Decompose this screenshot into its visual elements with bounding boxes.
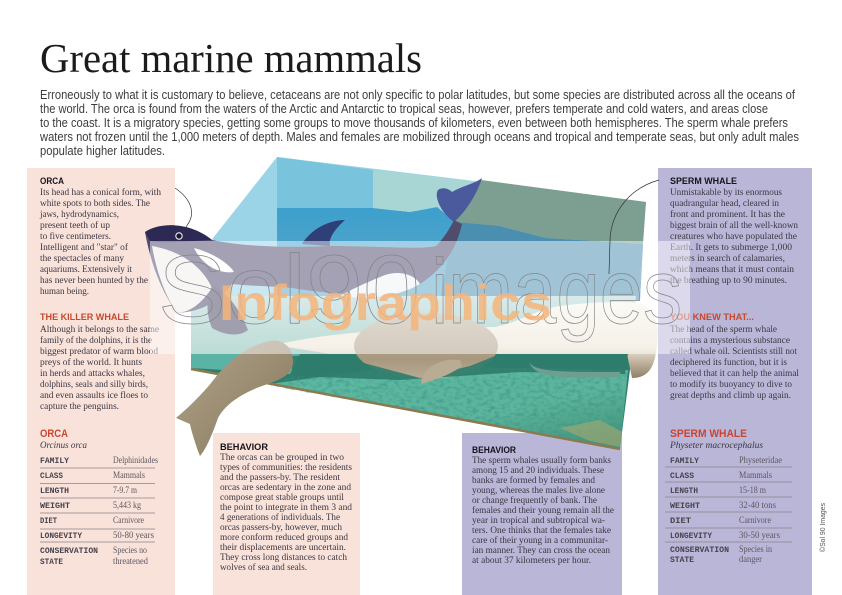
sperm whale [176,302,658,456]
sperm whale description: SPERM WHALE [670,176,737,186]
orca data table: 5,443 kg [113,500,141,510]
panel: orca behavior: BEHAVIOR [220,442,269,452]
sperm whale description [670,176,798,286]
panel: orca behavior: more conform reduced groups and [220,532,348,543]
killer whale description: capture the penguins. [40,401,119,412]
orca description: the spectacles of many [40,253,124,264]
whale tail [176,341,293,456]
sperm whale data table: CONSERVATION [670,545,729,555]
watermark: Infographics: Infographics [219,275,552,331]
killer whale description [40,312,159,412]
orca data table: ORCA [40,428,68,440]
tail fluke [437,178,482,222]
did you know text [670,312,799,401]
orca data table: LONGEVITY [40,531,83,541]
watermark: Sol90images [158,235,682,344]
orca pectoral fin [208,286,248,334]
sperm whale description: front and prominent. It has the [670,209,785,220]
callout line: orca [175,188,192,239]
sperm whale data table: SPERM WHALE [670,428,747,440]
illustration: ocean cross-section with whales [145,157,658,456]
did you know text: YOU KNEW THAT... [670,312,754,322]
panel: sperm whale behavior: ian manner. They can cross the ocean [472,545,610,556]
sperm whale data table: danger [739,554,762,564]
sperm whale data table: 30-50 years [739,530,780,540]
sperm whale data table [665,428,792,565]
sperm whale data table: Carnivore [739,515,771,525]
killer whale description: family of the dolphins, it is the [40,335,152,346]
panel: orca behavior: types of communities: the residents [220,462,352,473]
killer whale description: biggest predator of warm blood [40,346,158,357]
orca data table: Delphinidades [113,455,158,465]
did you know text: believed that it can help the animal [670,368,799,379]
panel: sperm whale behavior: care of their young in a communitar- [472,535,608,546]
orca description [39,176,161,297]
sperm whale data table: CLASS [670,471,694,481]
orca eye patch [194,248,234,272]
panel: orca behavior: orcas passers-by, however, much [220,522,342,533]
whale lower jaw [529,362,620,378]
panel: orca behavior: The orcas can be grouped in two [220,452,344,463]
callout line: sperm whale [609,180,659,274]
sperm whale data table: DIET [670,516,691,526]
panel: sperm whale behavior: year in tropical and subtropical wa- [472,515,605,526]
orca description: human being. [40,286,89,297]
orca belly [152,246,212,313]
watermark band [150,241,690,354]
panel: orca behavior: 4 generations of individuals. The [220,512,340,523]
whale fin [421,360,462,384]
sperm whale data table: Physeteridae [739,455,782,465]
sperm whale data table: LENGTH [670,486,698,496]
orca description: white spots to both sides. The [40,198,150,209]
orca description: aquariums. Extensively it [40,264,132,275]
orca description: to five centimeters. [40,231,111,242]
orca data table: Carnivore [113,515,144,525]
orca body [145,220,462,313]
did you know text: called whale oil. Scientists still not [670,346,797,357]
sperm whale description: quadrangular head, cleared in [670,198,779,209]
panel: orca behavior: orcas are sedentary in the zone and [220,482,351,493]
panel: sperm whale behavior: BEHAVIOR [472,445,516,455]
sperm whale description: Unmistakable by its enormous [670,187,782,198]
panel: orca behavior: their displacements are uncertain. [220,542,346,553]
whale hump [354,313,498,379]
orca data table: 7-9.7 m [113,485,137,495]
panel: sperm whale behavior: ters. One thinks that the females take [472,525,611,536]
orca data table: DIET [40,516,57,526]
orca description: has never been hunted by the [40,275,148,286]
watermark: Sol90images: images [431,241,682,343]
orca description: jaws, hydrodynamics, [39,209,119,220]
orca data table: CONSERVATION [40,546,98,556]
orca data table: LENGTH [40,486,69,496]
image credit: ©Sol 90 Images [819,503,827,552]
sperm whale data table: 32-40 tons [739,500,776,510]
intro text block [39,88,799,158]
panel: orca [27,168,175,595]
panel: orca behavior [213,433,360,595]
orca description: ORCA [40,176,64,186]
intro text block: populate higher latitudes. [40,144,165,158]
sperm whale data table: Mammals [739,470,772,480]
orca white belly patch [340,273,420,298]
orca data table: STATE [40,557,63,567]
dorsal fin [302,220,345,246]
orca data table: 50-80 years [113,530,154,540]
panel: sperm whale behavior: females and their young remain all the [472,505,614,516]
killer whale description: Although it belongs to the same [40,324,159,335]
orca data table: threatened [113,556,148,566]
killer whale description: in herds and attacks whales, [40,368,145,379]
killer whale description: THE KILLER WHALE [40,312,129,322]
sperm whale description: the breathing up to 90 minutes. [670,275,787,286]
sperm whale data table: Species in [739,544,772,554]
orca head cap [145,225,212,242]
panel: orca behavior: and the passers-by. The resident [220,472,340,483]
panel: sperm whale behavior: young, whereas the males live alone [472,485,605,496]
panel: orca behavior: They cross long distances to catch [220,552,347,563]
panel: sperm whale behavior: among 15 and 20 individuals. These [472,465,604,476]
panel: orca behavior: wolves of sea and seals. [220,562,307,573]
did you know text: The head of the sperm whale [670,324,777,335]
sperm whale data table: LONGEVITY [670,531,713,541]
sperm whale description: creatures who have populated the [670,231,797,242]
panel: sperm whale behavior [462,433,622,595]
orca data table: Orcinus orca [40,440,87,451]
sperm whale data table: 15-18 m [739,485,766,495]
killer whale description: dolphins, seals and silly birds, [40,379,148,390]
did you know text: great depths and climb up again. [670,390,791,401]
panel: orca behavior: the point to integrate in them 3 and [220,502,352,513]
whale body [275,302,658,378]
orca data table: Species no [113,545,147,555]
killer whale description: and even assaults ice floes to [40,390,148,401]
orca description: Intelligent and "star" of [40,242,129,253]
water box [191,157,646,448]
panel: sperm whale behavior: The sperm whales usually form banks [472,455,611,466]
panel: sperm whale behavior: banks are formed by females and [472,475,595,486]
sperm whale description: Earth. It gets to submerge 1,000 [670,242,792,253]
orca data table: Mammals [113,470,145,480]
sperm whale description: biggest brain of all the well-known [670,220,798,231]
sperm whale description: meters in search of calamaries, [670,253,785,264]
watermark: Sol90images: Sol90 [158,235,420,344]
did you know text: to modify its buoyancy to dive to [670,379,792,390]
panel: sperm whale behavior: or change frequently of bank. The [472,495,597,506]
orca [145,178,482,334]
panel: sperm whale [658,168,812,595]
sea floor [191,354,630,452]
did you know text: deciphered its function, but it is [670,357,787,368]
panel: orca behavior: compose great stable groups until [220,492,344,503]
sperm whale data table: WEIGHT [670,501,700,511]
title: Great marine mammals [40,35,422,81]
water panel in front of whale [292,354,628,380]
sperm whale description: which means that it must contain [670,264,794,275]
orca data table: WEIGHT [40,501,70,511]
sperm whale data table: FAMILY [670,456,700,466]
panel: sperm whale behavior: at about 37 kilometers per hour. [472,555,591,566]
orca description: Its head has a conical form, with [40,187,161,198]
orca description: present teeth of up [40,220,110,231]
orca data table: CLASS [40,471,63,481]
sperm whale data table: STATE [670,555,694,565]
orca data table [40,428,158,567]
sperm whale data table: Physeter macrocephalus [669,440,763,451]
killer whale description: preys of the world. It hunts [40,357,142,368]
did you know text: contains a mysterious substance [670,335,790,346]
orca data table: FAMILY [40,456,70,466]
